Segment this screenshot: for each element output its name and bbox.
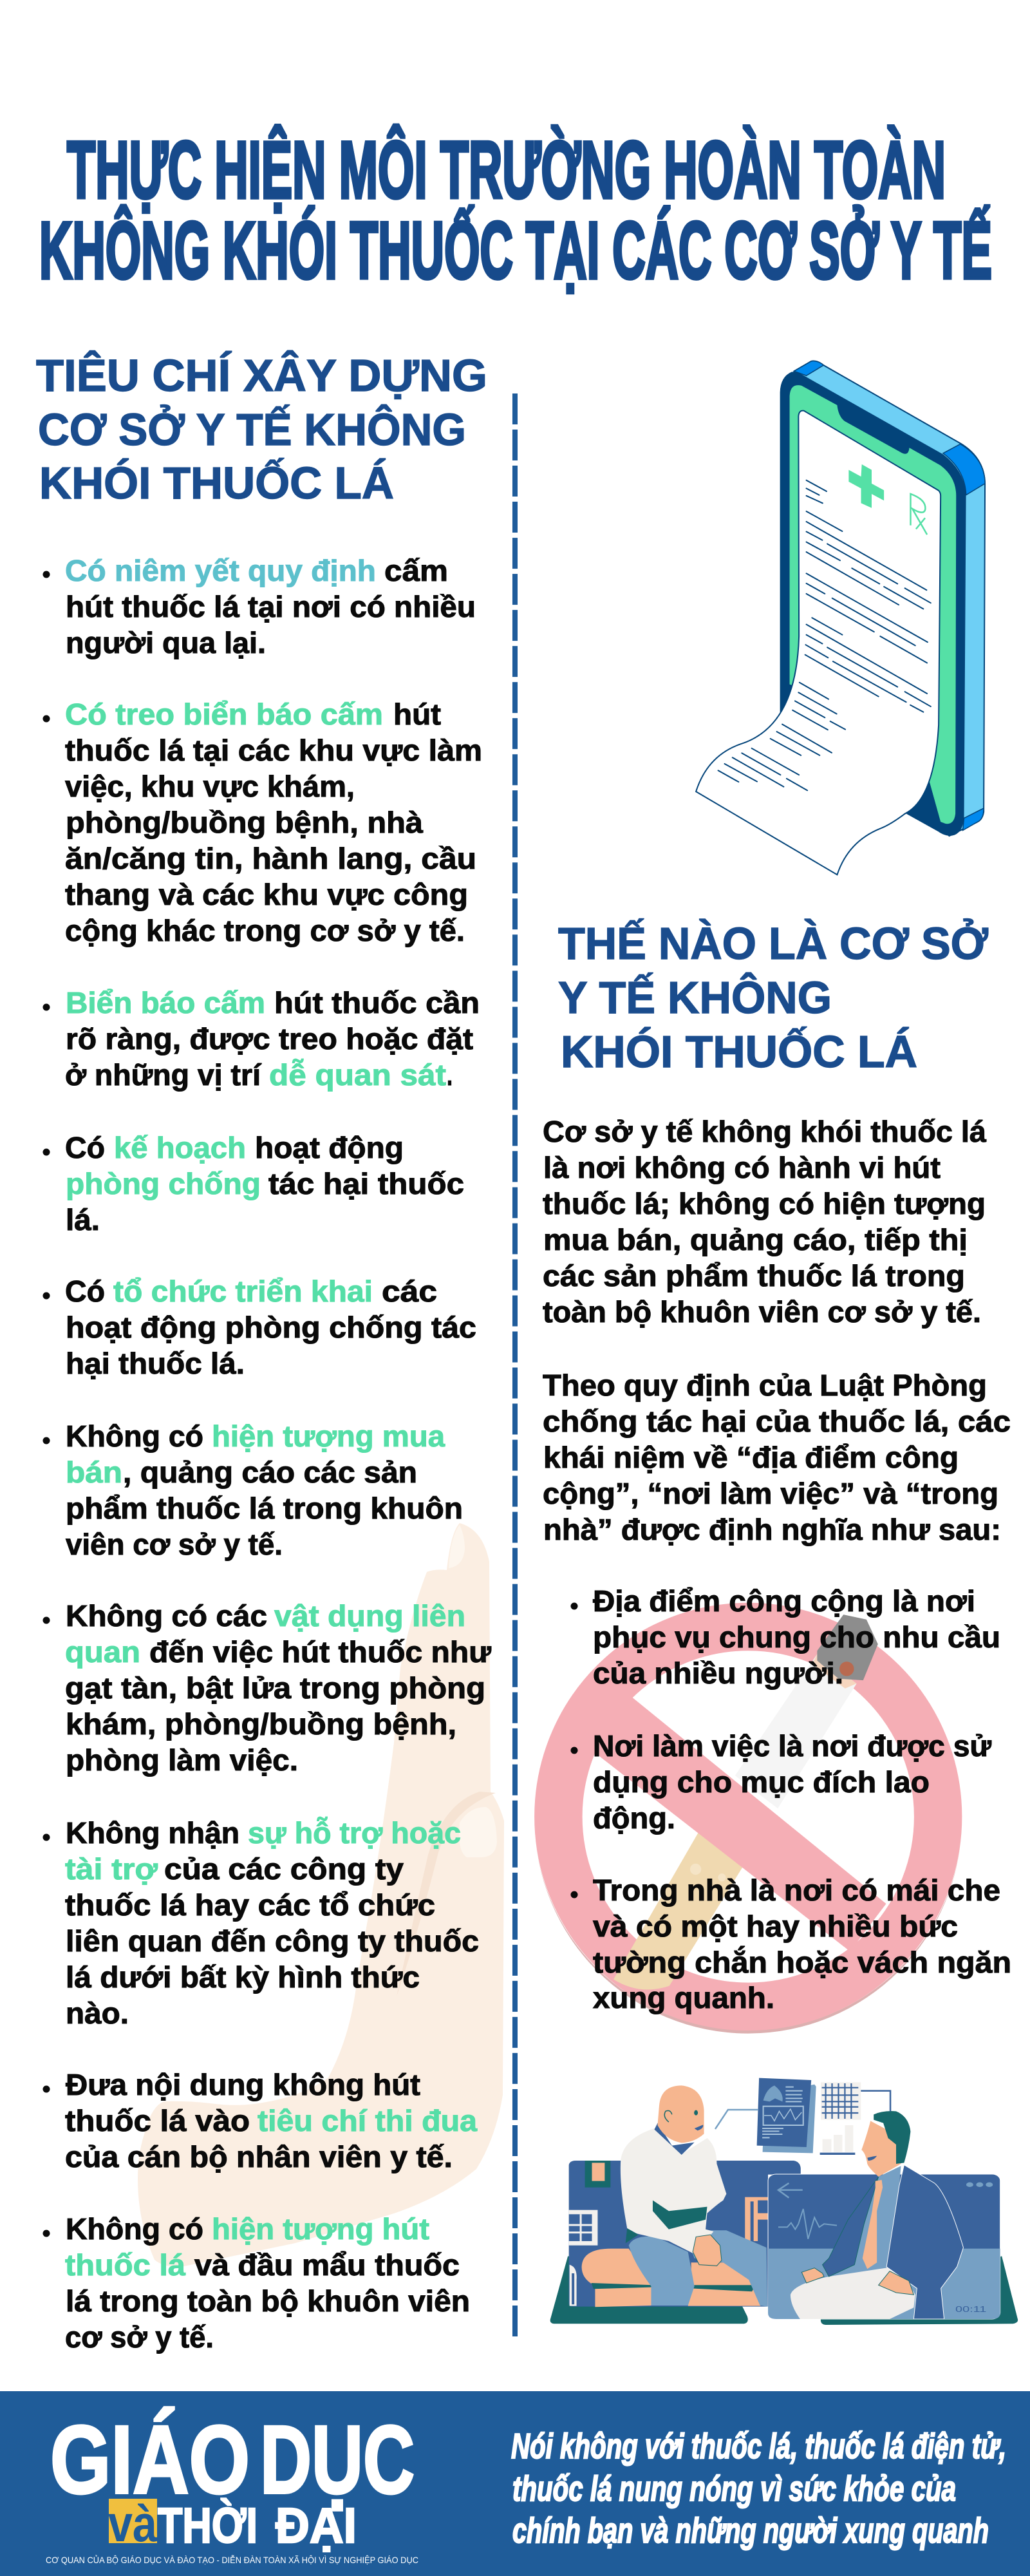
definition: indoors: xung quanh. [593,1981,774,2014]
item 5 [42,1274,476,1380]
title [39,126,992,296]
item 6 [42,1419,463,1561]
item 2 [42,697,482,947]
definition: public place: của nhiều người. [593,1656,843,1690]
item 2: ăn/căng tin, hành lang, cầu [65,842,476,875]
item 9: tiêu chí thi đua [258,2104,477,2137]
logo: GIÁO [50,2405,250,2514]
item 3: . [447,1058,453,1092]
item 10: thuốc lá [65,2248,185,2282]
right screen panel [768,2174,1000,2319]
logo: và [108,2495,157,2552]
item 8: lá dưới bất kỳ hình thức [66,1960,420,1994]
definition: indoors [570,1873,1011,2014]
text block: legal paragraph: chống tác hại của thuốc lá, các [543,1405,1011,1438]
illustration: doctor and patient [550,2078,1018,2325]
heading: definition: THẾ NÀO LÀ CƠ SỞ [558,918,988,969]
panel: criteria list [42,554,492,2354]
item 2: cộng khác trong cơ sở y tế. [65,914,465,947]
item 8: Không nhận [66,1816,239,1850]
item 7: đến việc hút thuốc như [149,1635,492,1669]
heading: criteria: CƠ SỞ Y TẾ KHÔNG [38,404,466,455]
item 1: Có niêm yết quy định [65,554,376,587]
text block: definition paragraph [543,1115,986,1329]
item 7 [42,1599,492,1777]
item 1: người qua lại. [66,626,266,659]
text block: legal paragraph [543,1368,1011,1546]
logo: DỤC [260,2405,415,2514]
item 2: việc, khu vực khám, [65,770,355,803]
item 5: hại thuốc lá. [66,1347,245,1380]
heading: criteria [36,350,487,508]
item 8: nào. [66,1996,129,2030]
icon: phone with prescription [696,361,985,875]
item 3: ở những vị trí [65,1058,262,1092]
text block: definition paragraph: là nơi không có hành vi hút [543,1151,941,1184]
prohibition bar [590,1690,886,1951]
heading: definition: Y TẾ KHÔNG [558,972,832,1023]
heading: definition: KHÓI THUỐC LÁ [561,1026,917,1077]
item 9: thuốc lá vào [65,2104,250,2137]
no smoking sign [535,1615,962,2034]
item 6: , quảng cáo các sản [123,1455,417,1489]
definition: indoors: và có một hay nhiều bức [593,1909,958,1943]
definition: public place [570,1584,1000,1690]
item 5: tổ chức triển khai [113,1274,373,1308]
item 1: cấm [384,554,448,587]
item 4: hoạt động [255,1131,404,1164]
logo: THỜI [158,2498,258,2553]
definition: workplace: động. [593,1801,675,1835]
item 6: phẩm thuốc lá trong khuôn [66,1492,463,1525]
item 7: phòng làm việc. [66,1743,298,1777]
item 8: sự hỗ trợ hoặc [248,1816,461,1850]
slogan [511,2426,1006,2550]
definition: indoors: tường chắn hoặc vách ngăn [593,1946,1011,1979]
text block: definition paragraph: Cơ sở y tế không khói thuốc lá [543,1115,986,1148]
panel: definitions list [570,1584,1011,2014]
item 10: và đầu mẩu thuốc [194,2248,460,2282]
text block: legal paragraph: nhà” được định nghĩa như sau: [543,1513,1001,1546]
teal floors [550,2256,748,2324]
item 5: hoạt động phòng chống tác [66,1311,476,1344]
heading: definition [558,918,988,1077]
item 3: Biển báo cấm [66,986,265,1019]
heading: criteria: TIÊU CHÍ XÂY DỰNG [36,350,487,401]
text block: legal paragraph: Theo quy định của Luật Phòng [543,1368,987,1402]
item 2: thuốc lá tại các khu vực làm [65,734,482,767]
logo: ĐẠI [276,2498,357,2553]
text block: legal paragraph: khái niệm về “địa điểm công [543,1441,959,1474]
item 7: vật dụng liên [274,1599,465,1633]
item 8 [42,1816,479,2030]
item 3 [42,986,480,1092]
item 6: Không có [66,1419,203,1453]
item 10: hiện tượng hút [212,2212,429,2246]
item 4: lá. [66,1203,100,1236]
icon: back arrow [778,2183,803,2198]
patient [621,2085,767,2307]
item 6: bán [66,1455,122,1489]
item 9 [42,2068,477,2174]
item 2: thang và các khu vực công [65,878,468,911]
item 4: phòng chống [66,1167,261,1200]
item 8: liên quan đến công ty thuốc [66,1924,479,1958]
item 9: của cán bộ nhân viên y tế. [65,2140,453,2174]
item 3: dễ quan sát [269,1058,446,1092]
item 3: rõ ràng, được treo hoặc đặt [66,1022,473,1056]
line chart grid [821,2082,890,2120]
item 7: khám, phòng/buồng bệnh, [66,1707,456,1741]
item 4: Có [65,1131,105,1164]
item 7: gạt tàn, bật lửa trong phòng [65,1671,485,1705]
pulse line [778,2209,837,2239]
item 1: hút thuốc lá tại nơi có nhiều [66,590,476,623]
item 2: Có treo biển báo cấm [65,697,383,731]
left screen panel [569,2161,801,2307]
item 5: các [382,1274,437,1308]
tagline: CƠ QUAN CỦA BỘ GIÁO DỤC VÀ ĐÀO TẠO - DIỄN ĐÀN TOÀN XÃ HỘI VÌ SỰ NGHIỆP GIÁO DỤC [46,2554,418,2565]
item 10 [42,2212,470,2354]
text block: definition paragraph: toàn bộ khuôn viên cơ sở y tế. [543,1295,981,1329]
doctor [791,2111,963,2319]
item 9: Đưa nội dung không hút [66,2068,420,2101]
item 2: hút [393,697,441,731]
item 10: cơ sở y tế. [65,2320,214,2354]
item 7: quan [65,1635,140,1669]
definition: workplace: Nơi làm việc là nơi được sử [593,1729,992,1763]
icon: cigarette [613,1615,878,1989]
speech connector [715,2110,758,2129]
item 6: hiện tượng mua [212,1419,445,1453]
bar chart [820,2125,855,2155]
definition: workplace [570,1729,992,1835]
background illustration: hand [138,1523,504,2267]
heading: criteria: KHÓI THUỐC LÁ [39,457,394,508]
item 4: tác hại thuốc [268,1167,464,1200]
text block: definition paragraph: thuốc lá; không có hiện tượng [543,1187,986,1220]
sofa [582,2249,656,2288]
timer: 00:11 [955,2304,986,2314]
item 4 [42,1131,464,1236]
item 8: của các công ty [164,1852,404,1886]
item 4: kế hoạch [114,1131,246,1164]
definition: workplace: dụng cho mục đích lao [593,1765,930,1799]
item 5: Có [65,1274,105,1308]
item 8: thuốc lá hay các tổ chức [65,1888,435,1922]
text block: legal paragraph: cộng”, “nơi làm việc” và “trong [543,1477,998,1510]
definition: public place: phục vụ chung cho nhu cầu [593,1620,1000,1654]
item 10: lá trong toàn bộ khuôn viên [66,2284,470,2318]
footer band [0,2391,1030,2576]
item 8: tài trợ [65,1852,158,1886]
item 2: phòng/buồng bệnh, nhà [66,806,423,839]
logo [50,2405,415,2553]
medical document [757,2078,816,2153]
vertical dashed divider [512,393,518,2336]
item 3: hút thuốc cần [274,986,480,1019]
item 1 [42,554,476,659]
text block: definition paragraph: mua bán, quảng cáo, tiếp thị [543,1223,968,1256]
item 10: Không có [66,2212,203,2246]
definition: indoors: Trong nhà là nơi có mái che [593,1873,1000,1907]
definition: public place: Địa điểm công cộng là nơi [593,1584,975,1618]
item 6: viên cơ sở y tế. [66,1528,283,1561]
item 7: Không có các [66,1599,267,1633]
text block: definition paragraph: các sản phẩm thuốc lá trong [543,1259,965,1293]
icon: prohibition ring [535,1627,962,2034]
